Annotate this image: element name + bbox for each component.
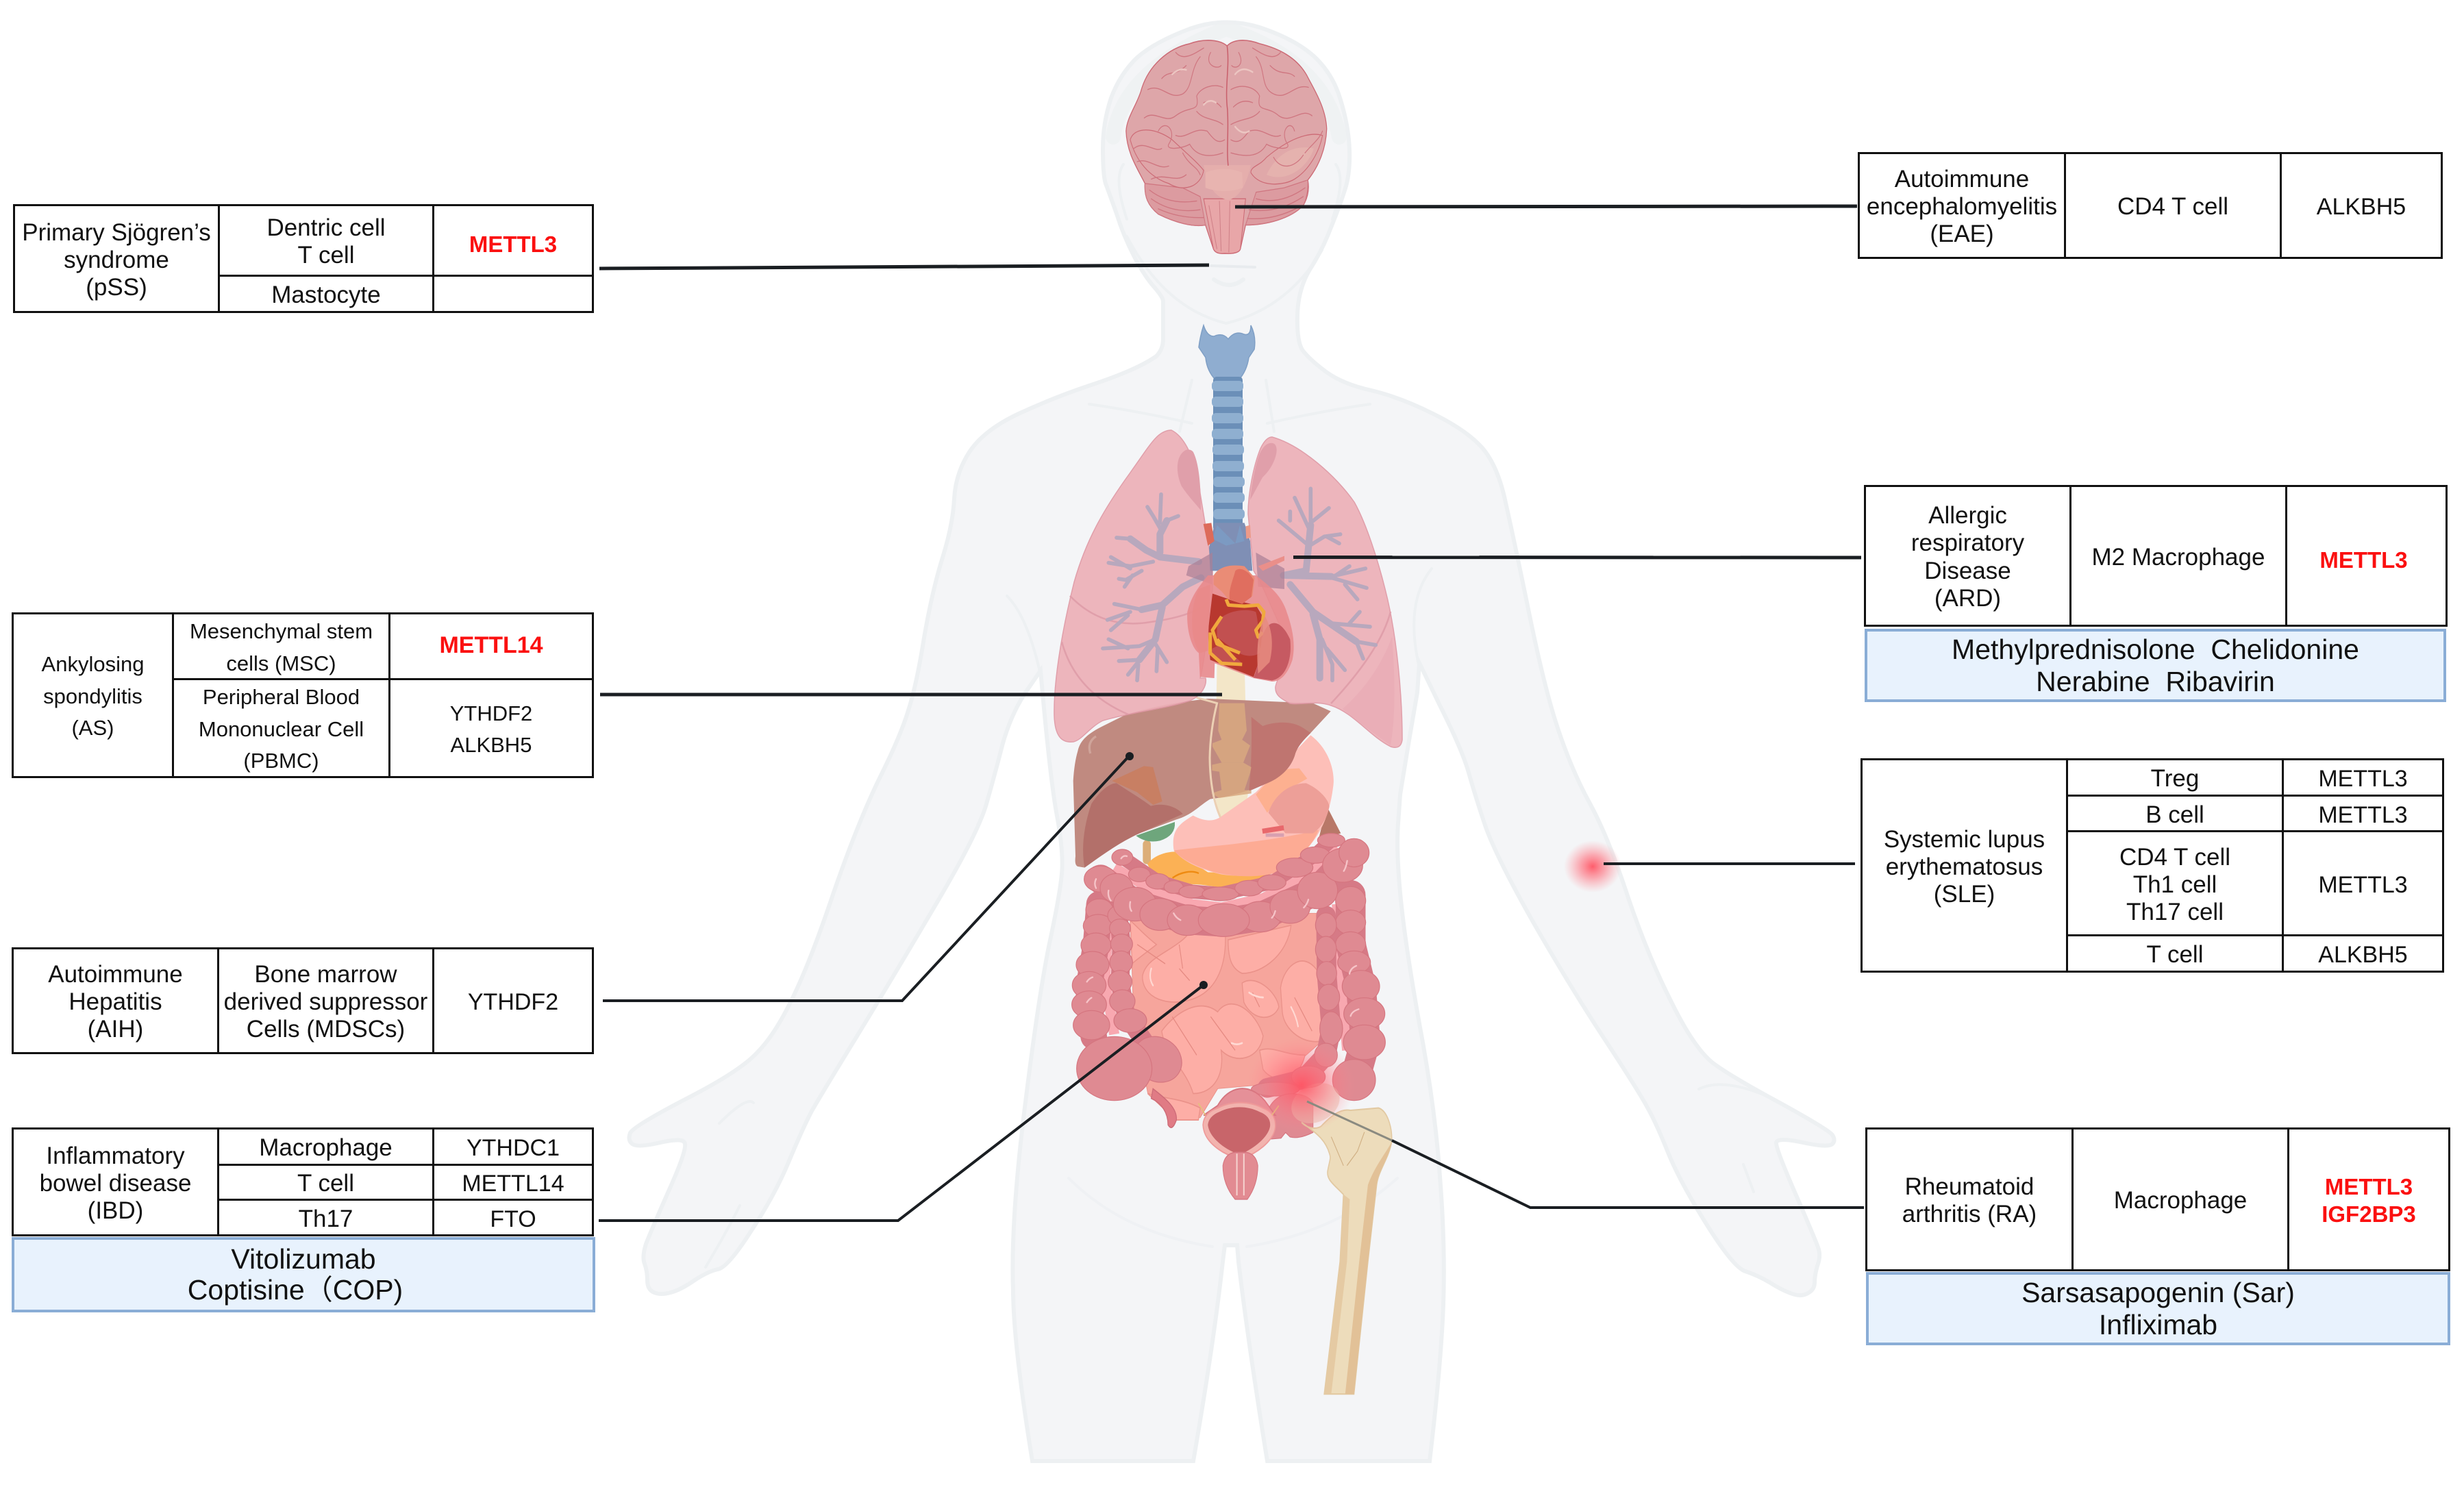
spine through liver xyxy=(1211,703,1252,798)
spleen xyxy=(1319,806,1341,839)
gene: METTL3 row 2 xyxy=(2282,795,2444,832)
abdominal organs behind xyxy=(1073,662,1341,889)
gene: FTO: FTO xyxy=(490,1206,536,1232)
panel: IBD table xyxy=(12,1127,594,1236)
disease: RA: Rheumatoid xyxy=(1905,1173,2034,1200)
panel: AS table xyxy=(12,612,594,778)
icon: bladder and prostate xyxy=(1198,1088,1279,1199)
cell: macrophage xyxy=(2071,1127,2289,1271)
disease: IBD: Inflammatory xyxy=(46,1143,185,1169)
gene: METTL3 xyxy=(2285,485,2448,627)
cell: Th17: Th17 xyxy=(299,1206,353,1232)
icon: pancreas xyxy=(1147,851,1274,889)
face and body contour details xyxy=(706,29,1781,1267)
cell: B cell xyxy=(2066,795,2284,832)
gene: METTL3 row 3 xyxy=(2282,830,2444,936)
gene: METTL14: METTL14 xyxy=(439,632,543,658)
disease: ARD: (ARD) xyxy=(1934,585,2001,612)
disease: EAE: encephalomyelitis xyxy=(1867,193,2057,220)
icon: brain xyxy=(1126,40,1327,253)
gene: METTL3 row 2: METTL3 xyxy=(2318,801,2408,827)
cell: CD4 T: CD4 T cell xyxy=(2117,193,2228,220)
cells: dentric and T xyxy=(218,204,434,277)
drugs: ARD: Nerabine Ribavirin xyxy=(2036,666,2275,697)
cell: T cell: T cell xyxy=(2147,941,2203,968)
disease: IBD: bowel disease xyxy=(40,1170,191,1196)
drugs: RA: Infliximab xyxy=(2099,1308,2217,1340)
connector: EAE xyxy=(1235,206,1857,207)
cell: MDSCs: Cells (MDSCs) xyxy=(247,1016,405,1043)
gene: METTL3 row 3: METTL3 xyxy=(2318,871,2408,897)
cell: macrophage: Macrophage xyxy=(259,1134,393,1161)
disease: RA: arthritis (RA) xyxy=(1902,1201,2037,1227)
disease: AS: Ankylosing xyxy=(42,652,144,676)
genes: YTHDF2 ALKBH5: YTHDF2 xyxy=(450,701,532,725)
connector: IBD xyxy=(599,981,1208,1221)
cell: Treg: Treg xyxy=(2151,765,2199,792)
cell: CD4 T xyxy=(2064,152,2282,259)
drugs: IBD xyxy=(12,1237,595,1312)
cell: MDSCs xyxy=(217,947,434,1054)
icon: lungs xyxy=(1054,430,1402,747)
cell: MDSCs: derived suppressor xyxy=(224,988,427,1015)
cells: dentric and T: Dentric cell xyxy=(266,214,386,241)
cell: B cell: B cell xyxy=(2145,801,2204,827)
disease: AS: spondylitis xyxy=(43,684,142,708)
gene: ALKBH5 xyxy=(2280,152,2443,259)
genes: METTL3 IGF2BP3: IGF2BP3 xyxy=(2322,1201,2416,1227)
cell: Th17 xyxy=(217,1199,434,1236)
gene: YTHDF2 xyxy=(432,947,594,1054)
cell: macrophage xyxy=(217,1127,434,1166)
disease: SLE: (SLE) xyxy=(1934,881,1995,907)
icon: gallbladder duct xyxy=(1143,840,1151,864)
disease: SLE xyxy=(1861,758,2068,973)
disease: SLE: erythematosus xyxy=(1886,853,2043,879)
colon stripes xyxy=(1105,848,1347,1050)
gene: METTL14: METTL14 xyxy=(462,1171,564,1197)
gene: empty xyxy=(432,275,594,313)
disease: SLE: Systemic lupus xyxy=(1884,826,2045,852)
inflammation: forearm xyxy=(1564,840,1621,893)
cell: T cell: T cell xyxy=(297,1170,354,1197)
icon: bronchi xyxy=(1103,488,1376,680)
icon: larynx and trachea xyxy=(1199,325,1255,531)
gene: METTL3 xyxy=(432,204,594,277)
disease: AS xyxy=(12,612,174,778)
connector: RA xyxy=(1307,1101,1864,1208)
gene: FTO xyxy=(432,1199,594,1236)
gene: METTL14 xyxy=(432,1164,594,1201)
connector: SLE xyxy=(1604,862,1855,865)
icon: appendix xyxy=(1152,1089,1176,1127)
cell: MDSCs: Bone marrow xyxy=(254,961,397,988)
disease: IBD xyxy=(12,1127,219,1236)
cell: MSC xyxy=(172,612,390,680)
cell: CD4 Th1 Th17 xyxy=(2066,830,2284,936)
cell: PBMC xyxy=(172,678,390,778)
connector: AIH xyxy=(603,752,1134,1001)
disease: ARD: Allergic xyxy=(1928,501,2007,529)
cell: Treg xyxy=(2066,758,2284,797)
colon continuous band outline xyxy=(1089,840,1365,1088)
icon: small intestine loops xyxy=(1130,921,1323,1127)
cell: T cell xyxy=(2066,934,2284,973)
body silhouette xyxy=(630,22,1834,1461)
disease: pSS: syndrome xyxy=(64,247,169,273)
disease: EAE: Autoimmune xyxy=(1895,166,2029,192)
disease: AIH: (AIH) xyxy=(88,1016,143,1043)
panel: pSS table xyxy=(13,204,594,313)
cell: CD4 Th1 Th17: Th17 cell xyxy=(2126,899,2224,925)
genes: YTHDF2 ALKBH5 xyxy=(388,678,594,778)
cell: macrophage: Macrophage xyxy=(2114,1187,2247,1214)
icon: small intestine base xyxy=(1130,913,1323,1120)
panel: ARD table xyxy=(1864,485,2448,627)
disease: AIH xyxy=(12,947,219,1054)
icon: liver xyxy=(1073,699,1331,868)
drugs: RA: Sarsasapogenin (Sar) xyxy=(2021,1277,2295,1308)
cell: PBMC: Mononuclear Cell xyxy=(199,717,364,741)
gene: YTHDF2: YTHDF2 xyxy=(468,989,558,1015)
disease: ARD xyxy=(1864,485,2071,627)
disease: EAE xyxy=(1858,152,2066,259)
gene: ALKBH5: ALKBH5 xyxy=(2317,194,2406,220)
cell: CD4 Th1 Th17: Th1 cell xyxy=(2133,871,2217,897)
drugs: RA xyxy=(1866,1272,2450,1345)
cell: M2: M2 Macrophage xyxy=(2092,544,2265,570)
icon: femur xyxy=(1289,1077,1392,1394)
disease: pSS: (pSS) xyxy=(86,274,147,300)
panel: AIH table xyxy=(12,947,594,1054)
inflammation: hip xyxy=(1248,1037,1355,1133)
cell: T cell xyxy=(217,1164,434,1201)
gene: ALKBH5 xyxy=(2282,934,2444,973)
gene: METTL3 row 1 xyxy=(2282,758,2444,797)
gene: ALKBH5: ALKBH5 xyxy=(2318,942,2408,968)
disease: AIH: Autoimmune xyxy=(48,961,183,988)
connector: AS xyxy=(600,693,1222,696)
panel: EAE table xyxy=(1858,152,2443,259)
drugs: ARD: Methylprednisolone Chelidonine xyxy=(1952,633,2359,664)
drugs: IBD: Vitolizumab xyxy=(231,1243,376,1275)
icon: gallbladder xyxy=(1136,822,1175,842)
brain folds xyxy=(1134,46,1323,219)
genes: METTL3 IGF2BP3: METTL3 xyxy=(2325,1174,2413,1199)
disease: pSS xyxy=(13,204,220,313)
gene: METTL3: METTL3 xyxy=(2319,547,2408,573)
cell: CD4 Th1 Th17: CD4 T cell xyxy=(2119,844,2230,870)
disease: IBD: (IBD) xyxy=(88,1197,143,1223)
cell: PBMC: Peripheral Blood xyxy=(203,685,360,709)
disease: ARD: respiratory xyxy=(1911,529,2024,556)
genes: YTHDF2 ALKBH5: ALKBH5 xyxy=(451,733,532,757)
gene: METTL14 xyxy=(388,612,594,680)
gene: METTL3: METTL3 xyxy=(469,232,557,257)
disease: AIH: Hepatitis xyxy=(69,988,162,1015)
disease: EAE: (EAE) xyxy=(1930,221,1994,247)
cell: M2 xyxy=(2069,485,2287,627)
icon: heart xyxy=(1186,523,1294,682)
panel: RA table xyxy=(1865,1127,2450,1271)
cell: MSC: cells (MSC) xyxy=(226,651,336,675)
panel: SLE table xyxy=(1861,758,2444,973)
drugs: ARD xyxy=(1865,629,2446,702)
gene: YTHDC1: YTHDC1 xyxy=(466,1135,560,1161)
cell: mastocyte: Mastocyte xyxy=(271,282,381,308)
drugs: IBD: Coptisine（COP) xyxy=(188,1274,403,1306)
gene: METTL3 row 1: METTL3 xyxy=(2318,766,2408,792)
disease: AS: (AS) xyxy=(71,716,114,740)
cell: PBMC: (PBMC) xyxy=(243,749,319,773)
connector: pSS xyxy=(599,265,1209,269)
icon: spine xyxy=(1215,662,1248,817)
genes: METTL3 IGF2BP3 xyxy=(2287,1127,2450,1271)
disease: RA xyxy=(1865,1127,2074,1271)
gene: YTHDC1 xyxy=(432,1127,594,1166)
icon: colon xyxy=(1072,834,1385,1139)
cells: dentric and T: T cell xyxy=(297,242,354,269)
connector: ARD xyxy=(1293,556,1861,559)
disease: pSS: Primary Sjögren’s xyxy=(22,219,211,245)
large and small intestine xyxy=(1072,834,1392,1394)
disease: ARD: Disease xyxy=(1924,558,2011,584)
cell: mastocyte xyxy=(218,275,434,313)
icon: stomach xyxy=(1173,735,1334,876)
cell: MSC: Mesenchymal stem xyxy=(190,619,373,643)
